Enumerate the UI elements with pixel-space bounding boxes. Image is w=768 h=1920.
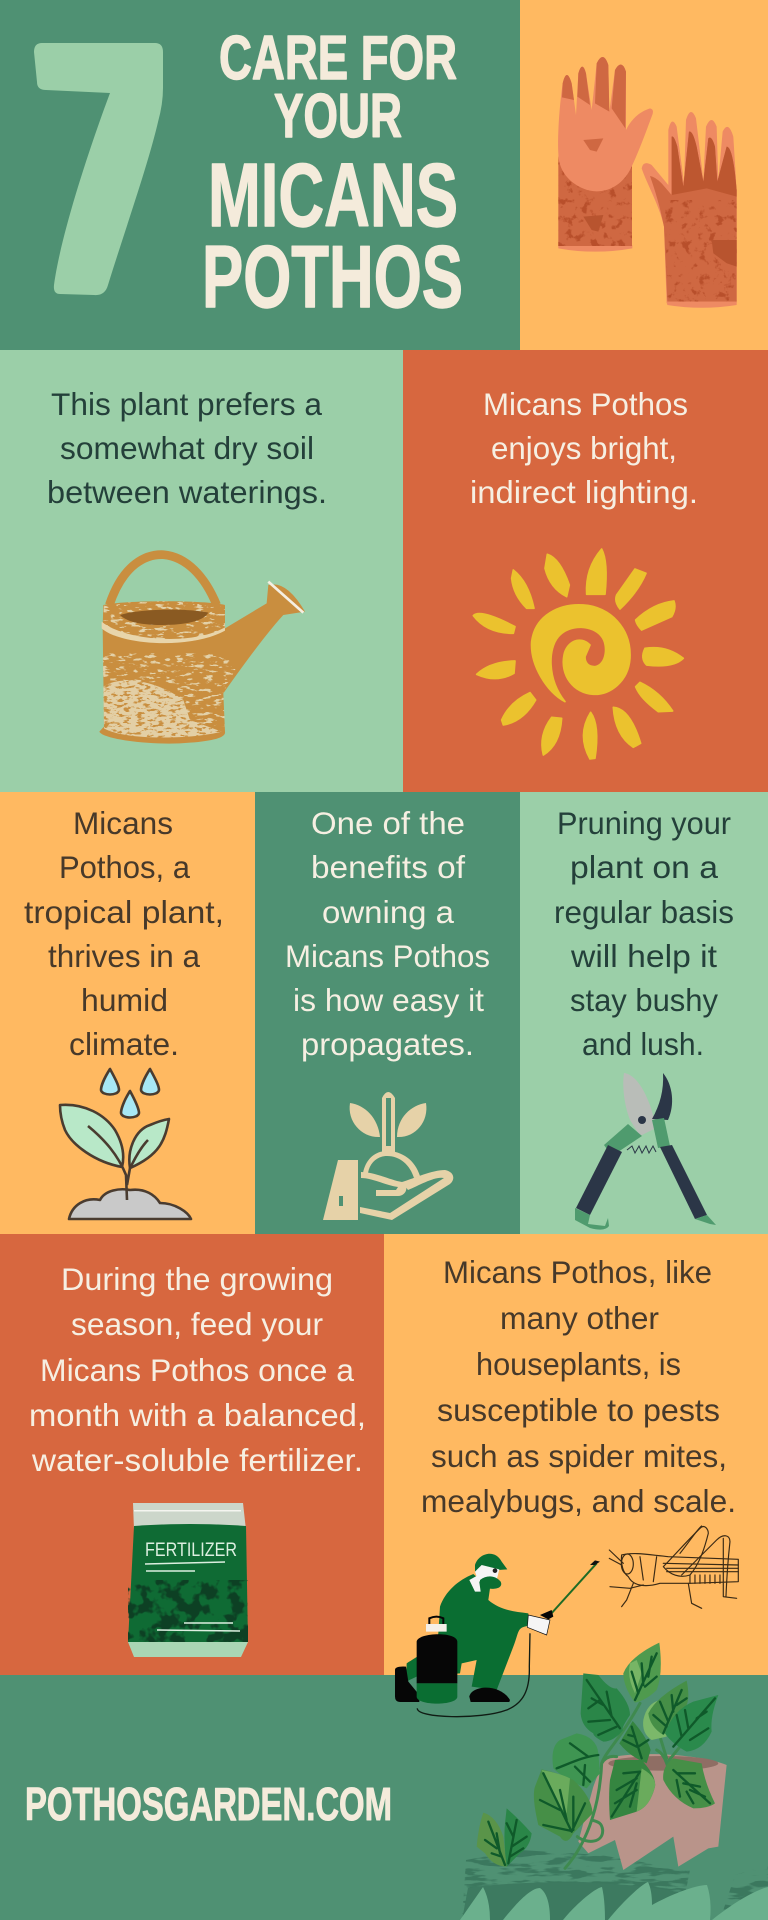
text: lighting tip: Micans Pothos [483, 386, 688, 422]
icon: hand holding sprout [323, 1092, 453, 1220]
text: fertilizer tip: During the growing [61, 1261, 333, 1297]
text: fertilizer tip: month with a balanced, [29, 1397, 366, 1433]
icon: seedling with drops [60, 1069, 191, 1219]
text: pests tip: many other [500, 1300, 659, 1336]
text: lighting tip [470, 386, 698, 510]
text: humidity tip: Pothos, a [59, 849, 190, 885]
text: pruning tip: and lush. [582, 1026, 704, 1062]
icon: fertilizer bag: FERTILIZER [145, 1540, 237, 1561]
text: pests tip [421, 1254, 736, 1519]
panel: pruning [520, 792, 768, 1234]
text: propagation tip: Micans Pothos [285, 938, 490, 974]
panel: lighting [403, 350, 768, 792]
text: watering tip: between waterings. [47, 474, 327, 510]
text: pests tip: mealybugs, and scale. [421, 1483, 736, 1519]
text: pests tip: houseplants, is [476, 1346, 681, 1382]
text: watering tip: somewhat dry soil [60, 430, 314, 466]
text: fertilizer tip: season, feed your [71, 1306, 323, 1342]
icon: pruning shears [575, 1073, 716, 1230]
icon: gardening gloves [558, 57, 737, 308]
icon: grasshopper [609, 1526, 738, 1608]
text: humidity tip: thrives in a [48, 938, 200, 974]
text: fertilizer tip: water-soluble fertilizer. [31, 1442, 363, 1478]
text: propagation tip: is how easy it [293, 982, 484, 1018]
text: propagation tip: propagates. [301, 1026, 474, 1062]
panel: propagation [255, 792, 520, 1234]
title: POTHOS [202, 227, 463, 326]
panel: watering [0, 350, 403, 792]
text: humidity tip: tropical plant, [24, 894, 224, 930]
icon: sun [473, 549, 683, 759]
text: website: POTHOSGARDEN.COM [25, 1778, 392, 1830]
text: lighting tip: indirect lighting. [470, 474, 698, 510]
text: humidity tip [24, 805, 224, 1062]
text: pruning tip: plant on a [570, 849, 719, 885]
title: MICANS [208, 146, 458, 246]
text: propagation tip: owning a [322, 894, 455, 930]
title: YOUR [274, 82, 402, 151]
text: propagation tip: benefits of [311, 849, 465, 885]
title [202, 24, 463, 326]
big number 7 [34, 43, 163, 295]
text: humidity tip: Micans [73, 805, 173, 841]
text: fertilizer tip [29, 1261, 366, 1478]
text: pruning tip: regular basis [554, 894, 734, 930]
text: pests tip: Micans Pothos, like [443, 1254, 712, 1290]
icon: watering can [99, 555, 305, 744]
text: lighting tip: enjoys bright, [491, 430, 677, 466]
text: pests tip: such as spider mites, [431, 1438, 727, 1474]
text: pruning tip [554, 805, 734, 1062]
icon: fertilizer bag [128, 1503, 248, 1657]
text: propagation tip: One of the [311, 805, 465, 841]
title: CARE FOR [219, 24, 457, 93]
panel: humidity [0, 792, 255, 1234]
icon: potted pothos [477, 1643, 727, 1870]
text: propagation tip [285, 805, 490, 1062]
text: pests tip: susceptible to pests [437, 1392, 720, 1428]
text: pruning tip: Pruning your [557, 805, 731, 841]
text: pruning tip: will help it [570, 938, 717, 974]
panel: gloves [520, 0, 768, 350]
text: humidity tip: humid [81, 982, 168, 1018]
text: pruning tip: stay bushy [570, 982, 718, 1018]
text: watering tip [47, 386, 327, 510]
panel: header [0, 0, 520, 350]
text: watering tip: This plant prefers a [51, 386, 322, 422]
panel: fertilizer [0, 1234, 384, 1675]
text: humidity tip: climate. [69, 1026, 179, 1062]
decorative foliage ground [460, 1850, 768, 1920]
panel: footer [0, 1675, 768, 1920]
text: fertilizer tip: Micans Pothos once a [40, 1352, 354, 1388]
panel: pests [384, 1234, 768, 1870]
icon: man spraying [395, 1554, 600, 1717]
